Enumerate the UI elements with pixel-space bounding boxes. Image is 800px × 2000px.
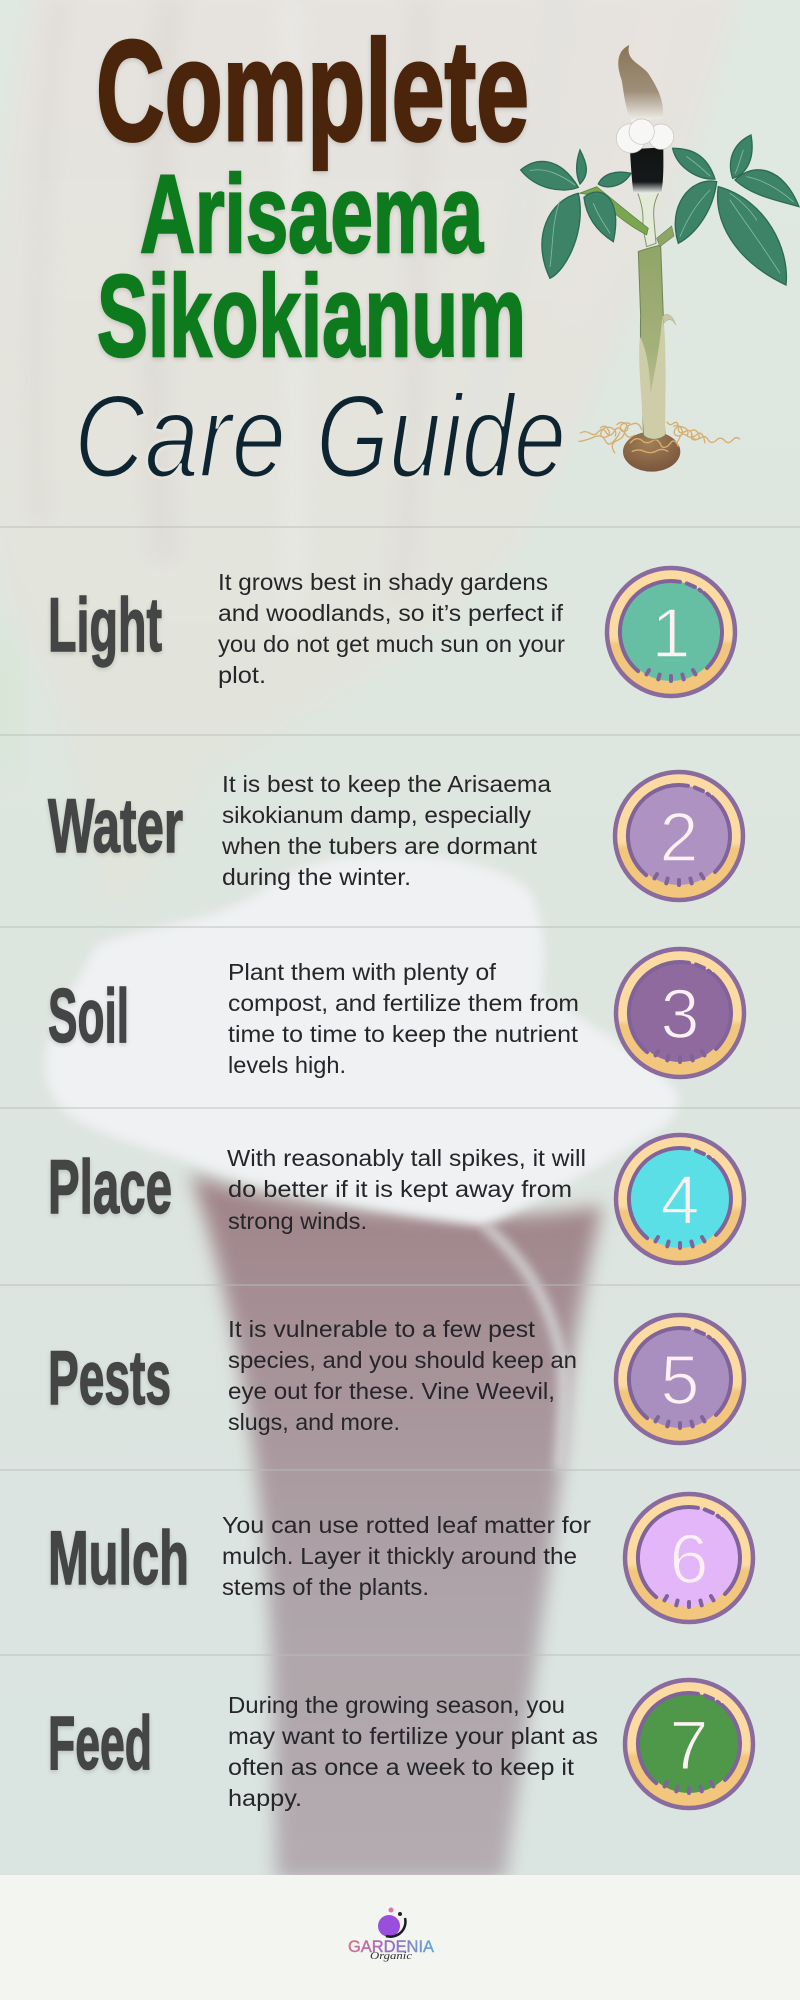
flower stalk bbox=[637, 190, 660, 247]
text: mulch care: mulch. Layer it thickly around the bbox=[222, 1543, 577, 1569]
panel: soil bbox=[48, 949, 744, 1078]
badge: 6 bbox=[625, 1494, 753, 1622]
badge: 5: 5 bbox=[661, 1341, 699, 1419]
title line: Care Guide: Guide bbox=[316, 371, 566, 503]
panel: water bbox=[48, 771, 743, 900]
badge: 4: 4 bbox=[661, 1161, 699, 1239]
white hood bbox=[616, 119, 674, 153]
text: light care: It grows best in shady gardens bbox=[218, 569, 548, 595]
stem sheath bbox=[639, 317, 666, 439]
text: feed care: may want to fertilize your plant as bbox=[228, 1723, 598, 1749]
text: pests care: eye out for these. Vine Weevil, bbox=[228, 1378, 555, 1404]
heading: Water: Water bbox=[48, 784, 183, 869]
tuber bbox=[623, 432, 680, 472]
row dividers bbox=[0, 527, 800, 1655]
right branch bbox=[657, 226, 674, 247]
heading: Feed: Feed bbox=[48, 1701, 152, 1786]
text: mulch care: stems of the plants. bbox=[222, 1574, 429, 1600]
roots bbox=[578, 422, 740, 453]
badge: 7: 7 bbox=[670, 1706, 708, 1784]
illustration: arisaema plant bbox=[521, 45, 799, 472]
heading: Soil: Soil bbox=[48, 974, 129, 1059]
text: pests care: slugs, and more. bbox=[228, 1409, 400, 1435]
stem bbox=[638, 245, 665, 439]
footer band bbox=[0, 1875, 800, 2000]
text: mulch care: You can use rotted leaf matter for bbox=[222, 1512, 591, 1538]
title line: Arisaema: Arisaema bbox=[140, 153, 484, 276]
text: feed care: During the growing season, you bbox=[228, 1692, 565, 1718]
badge: 3: 3 bbox=[661, 975, 699, 1053]
heading: Light: Light bbox=[48, 583, 162, 668]
heading: Pests: Pests bbox=[48, 1336, 171, 1421]
badge: 2 bbox=[615, 772, 743, 900]
text: soil care bbox=[228, 959, 579, 1078]
text: water care: when the tubers are dormant bbox=[221, 833, 537, 859]
text: water care bbox=[221, 771, 552, 890]
text: light care: and woodlands, so it’s perfect if bbox=[218, 600, 563, 626]
text: place care: do better if it is kept away from bbox=[228, 1176, 572, 1202]
text: water care: during the winter. bbox=[222, 864, 411, 890]
right leaves bbox=[673, 135, 799, 285]
text: soil care: time to time to keep the nutrient bbox=[228, 1021, 578, 1047]
title line: Complete: Complete bbox=[96, 12, 529, 171]
heading: Mulch: Mulch bbox=[48, 1516, 189, 1601]
text: feed care: happy. bbox=[228, 1785, 302, 1811]
logo: Gardenia Organic bbox=[348, 1908, 434, 1962]
text: soil care: Plant them with plenty of bbox=[228, 959, 496, 985]
text: pests care: It is vulnerable to a few pest bbox=[228, 1316, 535, 1342]
title line: Care Guide bbox=[74, 371, 566, 503]
panel: pests bbox=[48, 1315, 744, 1443]
logo icon bbox=[378, 1908, 405, 1937]
text: light care: you do not get much sun on your bbox=[218, 631, 565, 657]
stem bract bbox=[662, 314, 676, 325]
badge: 1 bbox=[607, 568, 735, 696]
badge: 2: 2 bbox=[660, 798, 698, 876]
text: light care bbox=[218, 569, 565, 688]
text: feed care: often as once a week to keep it bbox=[228, 1754, 574, 1780]
logo wordmark: GARDENIA bbox=[348, 1938, 434, 1956]
panel: light bbox=[48, 568, 735, 696]
badge: 7 bbox=[625, 1680, 753, 1808]
flower spadix bbox=[618, 45, 663, 122]
left leaves bbox=[521, 150, 631, 278]
left branch bbox=[579, 187, 648, 235]
text: soil care: compost, and fertilize them from bbox=[228, 990, 579, 1016]
black spathe tube bbox=[630, 147, 663, 193]
panel: place bbox=[48, 1135, 744, 1263]
text: place care bbox=[227, 1145, 586, 1234]
text: soil care: levels high. bbox=[228, 1052, 346, 1078]
heading: Place: Place bbox=[48, 1145, 172, 1230]
panel: mulch bbox=[48, 1494, 753, 1622]
text: place care: With reasonably tall spikes, it will bbox=[227, 1145, 586, 1171]
text: water care: sikokianum damp, especially bbox=[222, 802, 531, 828]
badge: 6: 6 bbox=[670, 1520, 708, 1598]
text: water care: It is best to keep the Arisaema bbox=[222, 771, 552, 797]
title line: Care Guide: Care bbox=[74, 371, 286, 503]
badge: 3 bbox=[616, 949, 744, 1077]
badge: 4 bbox=[616, 1135, 744, 1263]
title line: Sikokianum: Sikokianum bbox=[97, 251, 526, 381]
badge: 5 bbox=[616, 1315, 744, 1443]
text: place care: strong winds. bbox=[228, 1208, 367, 1234]
text: mulch care bbox=[222, 1512, 591, 1600]
logo script: Organic bbox=[370, 1950, 412, 1962]
panel: feed bbox=[48, 1680, 753, 1811]
title bbox=[74, 12, 566, 503]
text: light care: plot. bbox=[218, 662, 266, 688]
text: pests care: species, and you should keep an bbox=[228, 1347, 577, 1373]
text: pests care bbox=[228, 1316, 577, 1435]
badge: 1: 1 bbox=[652, 594, 690, 672]
text: feed care bbox=[228, 1692, 598, 1811]
